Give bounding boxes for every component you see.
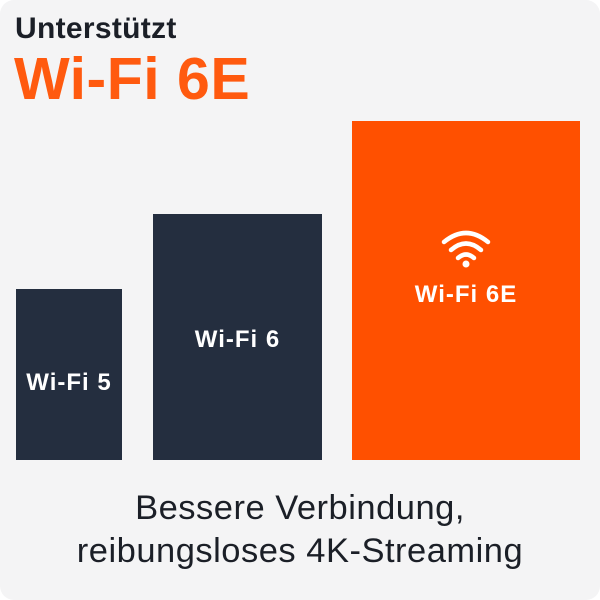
bar: Wi-Fi 6	[153, 214, 322, 460]
bar: Wi-Fi 5	[16, 289, 122, 460]
bar: Wi-Fi 6E	[352, 121, 580, 460]
caption text: Bessere Verbindung,	[135, 489, 465, 527]
caption text: reibungsloses 4K-Streaming	[77, 532, 523, 570]
caption text	[77, 489, 523, 570]
heading: Wi-Fi 6E: Wi-Fi 6E	[14, 46, 250, 112]
label: Wi-Fi 6E: Wi-Fi 6E	[415, 281, 517, 308]
label: Wi-Fi 6: Wi-Fi 6	[195, 326, 280, 353]
label: Wi-Fi 5: Wi-Fi 5	[26, 369, 112, 396]
icon: wifi	[442, 230, 490, 268]
heading: Unterstützt: Unterstützt	[15, 12, 177, 45]
